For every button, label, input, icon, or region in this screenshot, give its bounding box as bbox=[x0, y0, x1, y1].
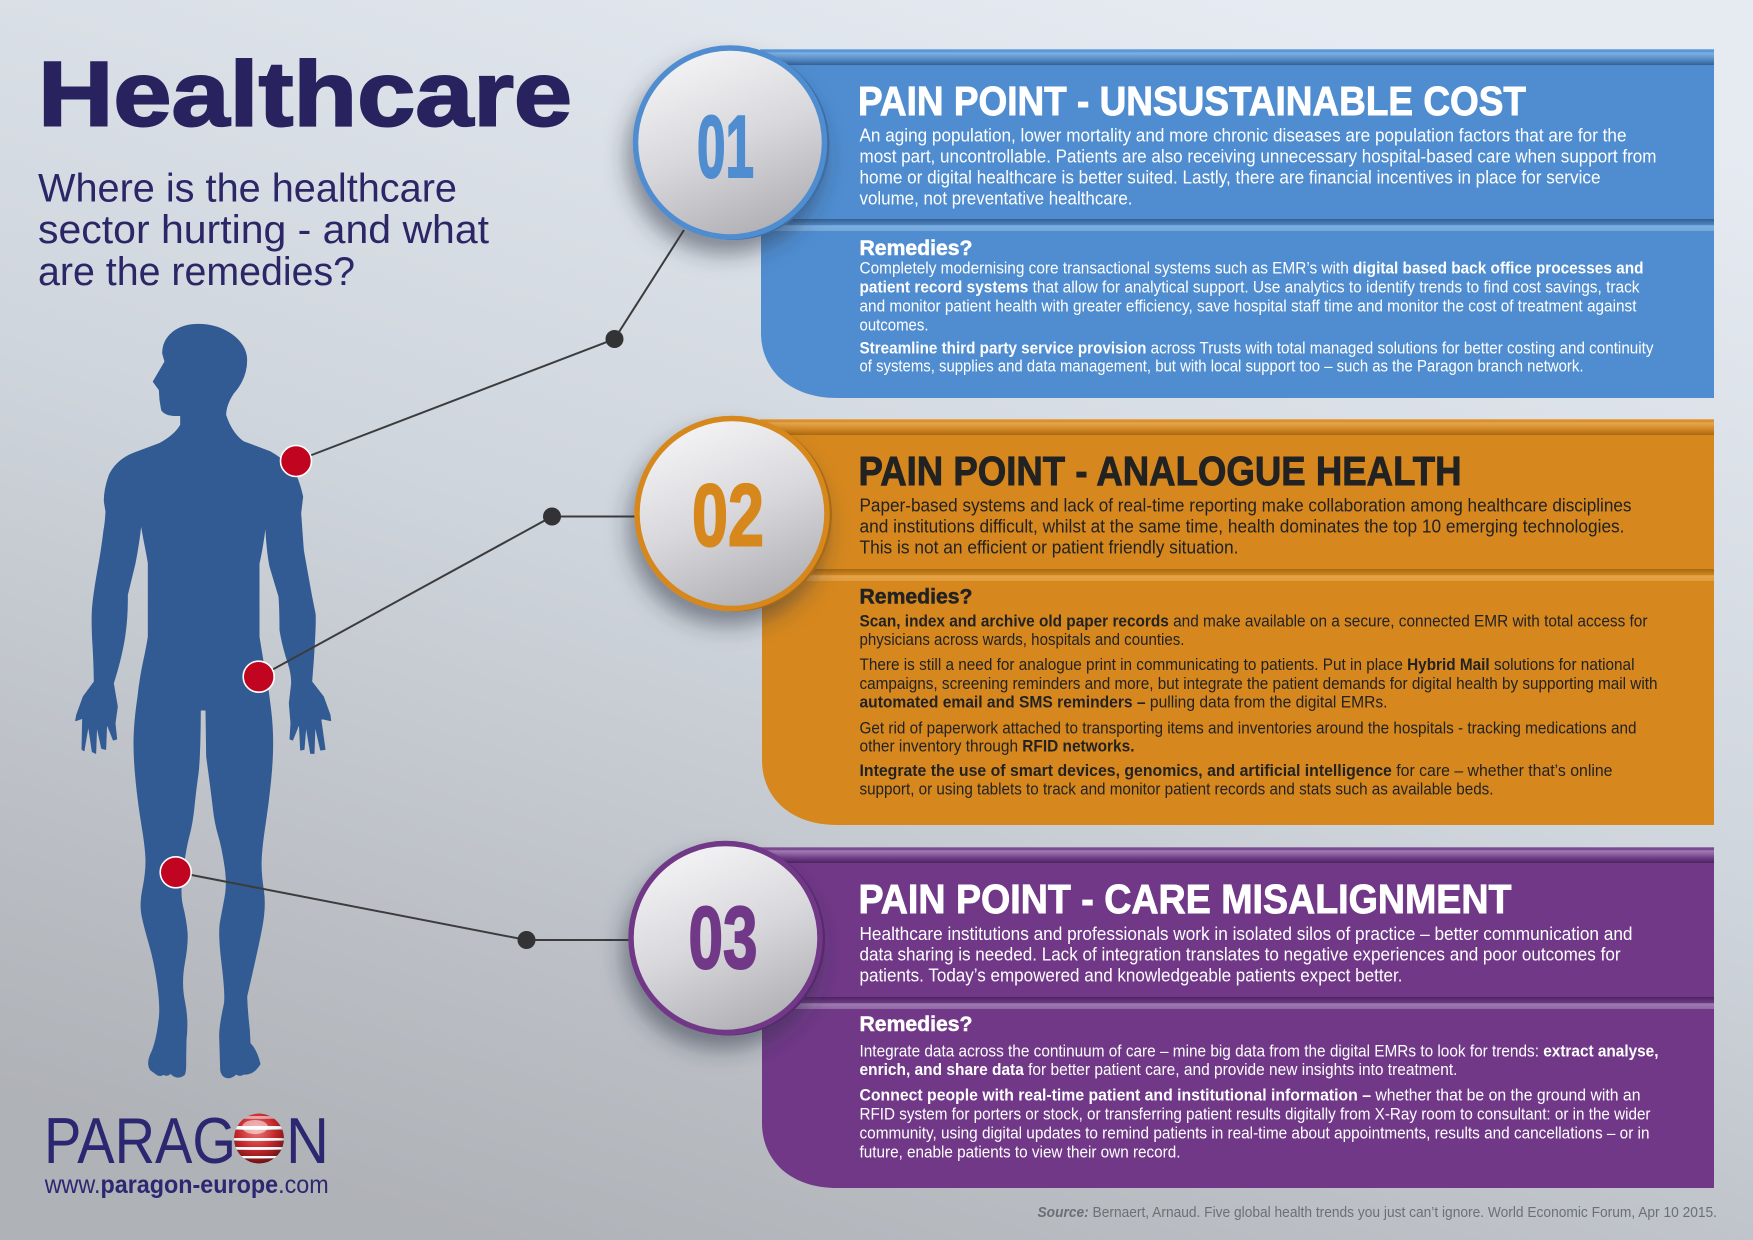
remedies text 01 bbox=[860, 259, 1654, 376]
title: Healthcare bbox=[38, 44, 572, 146]
badge 01: 01 bbox=[697, 97, 754, 196]
human body silhouette bbox=[76, 324, 331, 1078]
badge 01 bbox=[636, 47, 830, 240]
remedies text 02: Integrate the use of smart devices, genomics, and artificial intelligence for care – whether that’s online bbox=[860, 762, 1612, 780]
remedies text 02 bbox=[860, 613, 1658, 798]
description 01: volume, not preventative healthcare. bbox=[860, 187, 1132, 208]
subtitle: are the remedies? bbox=[38, 250, 355, 294]
description 02: and institutions difficult, whilst at the same time, health dominates the top 10 emerging technologies. bbox=[860, 516, 1624, 537]
website address: www.paragon-europe.com bbox=[44, 1171, 329, 1199]
badge 03: 03 bbox=[688, 888, 758, 987]
remedies text 02: There is still a need for analogue print in communicating to patients. Put in place Hybrid Mail solutions for national bbox=[860, 656, 1635, 674]
remedies text 03 bbox=[860, 1043, 1658, 1161]
remedies text 01: Completely modernising core transactional systems such as EMR’s with digital based back office processes and bbox=[860, 259, 1644, 277]
remedies heading 01: Remedies? bbox=[860, 237, 972, 260]
remedies text 02: physicians across wards, hospitals and counties. bbox=[860, 631, 1184, 649]
remedies text 01: outcomes. bbox=[860, 317, 928, 335]
remedies text 02: automated email and SMS reminders – pulling data from the digital EMRs. bbox=[860, 694, 1388, 712]
heading 01: PAIN POINT - UNSUSTAINABLE COST bbox=[858, 78, 1526, 124]
description 02: This is not an efficient or patient friendly situation. bbox=[860, 536, 1238, 557]
description 02: Paper-based systems and lack of real-time reporting make collaboration among healthcare disciplines bbox=[860, 495, 1632, 516]
remedies text 01: Streamline third party service provision across Trusts with total managed solutions for better costing and continuity bbox=[860, 339, 1654, 357]
description 01: home or digital healthcare is better suited. Lastly, there are financial incentives in place for service bbox=[860, 166, 1600, 187]
subtitle: Where is the healthcare bbox=[38, 166, 457, 210]
remedies text 03: Connect people with real-time patient and institutional information – whether that be on the ground with an bbox=[860, 1087, 1640, 1105]
remedies text 01: and monitor patient health with greater efficiency, save hospital staff time and monitor the cost of treatment against bbox=[860, 298, 1637, 316]
remedies text 02: support, or using tablets to track and monitor patient records and stats such as available beds. bbox=[860, 780, 1494, 798]
remedies text 02: campaigns, screening reminders and more, but integrate the patient demands for digital health by supporting mail with bbox=[860, 675, 1658, 693]
badge 03 bbox=[631, 842, 825, 1036]
remedies text 01: patient record systems that allow for analytical support. Use analytics to identify trends to find cost savings, track bbox=[860, 279, 1640, 297]
remedies text 02: Scan, index and archive old paper records and make available on a secure, connected EMR with total access for bbox=[860, 613, 1648, 631]
logo: Paragon: PARAG bbox=[44, 1104, 236, 1177]
remedies text 03: future, enable patients to view their own record. bbox=[860, 1143, 1180, 1161]
remedies text 01: of systems, supplies and data management, but with local support too – such as the Paragon branch network. bbox=[860, 358, 1584, 376]
description 01: An aging population, lower mortality and more chronic diseases are population factors that are for the bbox=[860, 125, 1626, 146]
connector lines bbox=[176, 230, 684, 940]
remedies heading 02: Remedies? bbox=[860, 585, 972, 608]
remedies text 02: other inventory through RFID networks. bbox=[860, 738, 1134, 756]
subtitle bbox=[38, 166, 489, 294]
icon: striped globe bbox=[234, 1114, 284, 1164]
logo: Paragon: N bbox=[286, 1104, 329, 1177]
panel 03: care misalignment bbox=[631, 842, 1714, 1188]
connector nodes bbox=[518, 330, 624, 949]
panel 01: unsustainable cost bbox=[636, 47, 1714, 398]
remedies text 03: enrich, and share data for better patient care, and provide new insights into treatment. bbox=[860, 1061, 1458, 1079]
description 01 bbox=[860, 125, 1656, 208]
badge 02 bbox=[637, 418, 832, 612]
remedies text 02: Get rid of paperwork attached to transporting items and inventories around the hospitals - tracking medications and bbox=[860, 719, 1636, 737]
remedies text 03: Integrate data across the continuum of care – mine big data from the digital EMRs to look for trends: extract analyse, bbox=[860, 1043, 1658, 1061]
remedies heading 03: Remedies? bbox=[860, 1013, 972, 1036]
description 03 bbox=[860, 923, 1632, 986]
panel 02: analogue health bbox=[637, 418, 1714, 825]
description 02 bbox=[860, 495, 1632, 557]
description 03: patients. Today’s empowered and knowledgeable patients expect better. bbox=[860, 965, 1402, 986]
description 01: most part, uncontrollable. Patients are also receiving unnecessary hospital-based care when support from bbox=[860, 146, 1656, 167]
heading 02: PAIN POINT - ANALOGUE HEALTH bbox=[858, 448, 1462, 494]
remedies text 03: community, using digital updates to remind patients in real-time about appointments, results and cancellations – or in bbox=[860, 1124, 1650, 1142]
red pain markers on body bbox=[160, 446, 312, 888]
badge 02: 02 bbox=[692, 466, 764, 564]
heading 03: PAIN POINT - CARE MISALIGNMENT bbox=[858, 876, 1512, 922]
source citation: Source: Bernaert, Arnaud. Five global health trends you just can’t ignore. World Economic Forum, Apr 10 2015. bbox=[1038, 1204, 1717, 1221]
remedies text 03: RFID system for porters or stock, or transferring patient results digitally from X-Ray room to consultant: or in the wider bbox=[860, 1105, 1651, 1123]
subtitle: sector hurting - and what bbox=[38, 208, 489, 252]
logo: Paragon bbox=[44, 1114, 328, 1198]
description 03: data sharing is needed. Lack of integration translates to negative experiences and poor outcomes for bbox=[860, 944, 1620, 965]
description 03: Healthcare institutions and professionals work in isolated silos of practice – better communication and bbox=[860, 923, 1632, 944]
